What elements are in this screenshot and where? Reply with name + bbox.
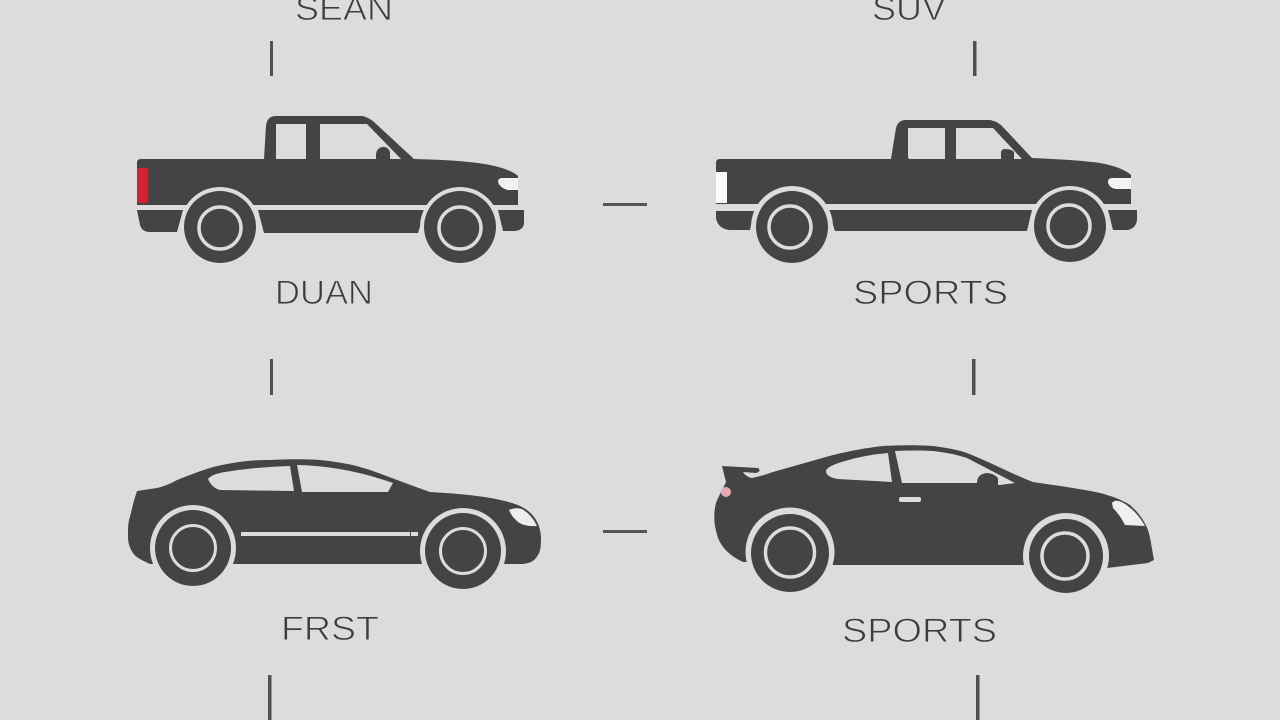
connector: bottom right [976, 675, 980, 720]
label: FRST: FRST [281, 610, 379, 648]
icon: pickup truck right [716, 120, 1137, 268]
label: SPORTS upper: SPORTS [853, 274, 1008, 312]
connector: middle left [270, 359, 273, 395]
icon: sports car [714, 445, 1154, 599]
connector: lower middle dash [603, 530, 647, 533]
icon: sedan [120, 459, 560, 594]
connector: middle right [972, 359, 976, 395]
connector: top left [270, 41, 273, 76]
label: DUAN: DUAN [275, 274, 373, 312]
connector: top right [973, 41, 976, 76]
label: SPORTS lower: SPORTS [842, 612, 997, 650]
icon: pickup truck left [137, 116, 524, 267]
connector: bottom left [268, 675, 272, 720]
connector: upper middle dash [603, 203, 647, 206]
